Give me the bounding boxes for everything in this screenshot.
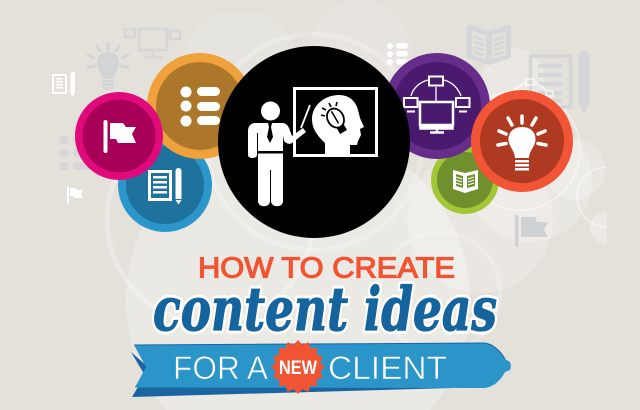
icon: flag: [104, 120, 136, 153]
icon: open book: [453, 170, 478, 193]
ribbon text: for a: FOR A: [173, 350, 269, 386]
circle: orange list: [147, 53, 253, 159]
circle: purple network: [384, 53, 490, 159]
faded icon: white list top: [387, 43, 408, 65]
ribbon banner: [131, 340, 511, 397]
faded icon: small network behind red circle: [513, 79, 553, 96]
badge: new: NEW: [279, 358, 317, 379]
faded icon: list: [60, 136, 95, 170]
ribbon text: client: CLIENT: [328, 350, 447, 386]
faded icon: document and pencil: [530, 50, 589, 113]
icon: presenter figure: [248, 102, 310, 206]
faded icon: book: [467, 25, 511, 65]
badge: new: [271, 340, 325, 394]
heading: content ideas: content ideas: [153, 275, 497, 345]
faded icon: light bulb: [88, 43, 128, 90]
icon: list: [180, 86, 220, 126]
faded icon: monitor network: [125, 29, 180, 57]
circle: blue document: [118, 138, 212, 232]
icon: board with head: [294, 88, 376, 156]
faded icon: small white flag: [67, 186, 83, 204]
circle: red light bulb: [471, 90, 573, 192]
faded icon: white document small: [52, 72, 75, 97]
circle: pink flag: [75, 92, 163, 180]
circle: black presenter: [218, 46, 410, 238]
heading: content ideas: content ideas: [153, 275, 497, 345]
icon: network of monitors: [404, 76, 470, 132]
circle: green book: [431, 146, 499, 214]
heading: how to create: HOW TO CREATE: [198, 252, 455, 284]
background bubbles: [104, 32, 606, 410]
icon: light bulb: [498, 116, 546, 170]
icon: document and pencil: [148, 168, 182, 204]
faded icon: grey flag: [515, 215, 548, 247]
